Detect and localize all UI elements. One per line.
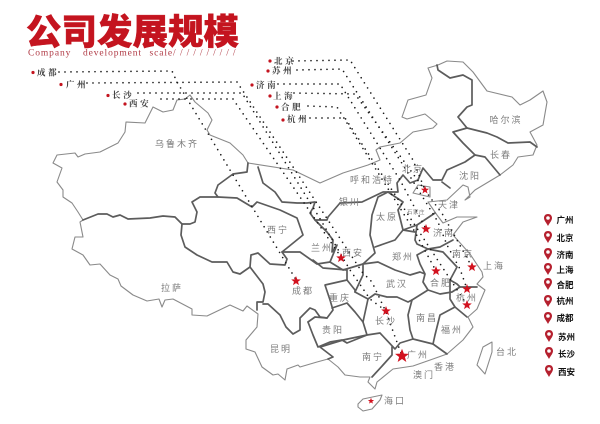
city names on map: 沈阳: [459, 170, 481, 181]
legend: city list: [544, 214, 576, 377]
legend: city list: 济南: [556, 250, 574, 260]
city names on map: 南京: [452, 248, 474, 259]
city names on map: 澳门: [413, 369, 435, 380]
city names on map: 海口: [384, 395, 406, 406]
city names on map: 南昌: [416, 312, 438, 323]
city names on map: 成都: [292, 285, 314, 296]
callout labels: 合肥: [281, 102, 303, 112]
route: suzhou: [297, 69, 467, 289]
subtitle: scale/: [150, 48, 177, 58]
city names on map: 广州: [407, 349, 429, 360]
route: hangzhou: [310, 118, 467, 305]
city names on map: 杭州: [456, 292, 478, 303]
city names on map: 哈尔滨: [489, 114, 523, 125]
city names on map: 西安: [342, 247, 364, 258]
legend: city list: 杭州: [556, 296, 574, 306]
city names on map: 贵阳: [322, 324, 344, 335]
city names on map: 上海: [483, 260, 505, 271]
city names on map: 呼和浩特: [350, 174, 394, 185]
red star markers: [291, 186, 477, 404]
province boundaries: [83, 65, 537, 377]
route: chengdu: [59, 71, 298, 283]
callout labels: 济南: [256, 80, 278, 90]
island: taiwan: [477, 342, 492, 374]
legend: city list: 西安: [558, 367, 576, 377]
callout labels: 西安: [129, 98, 151, 108]
city names on map: 武汉: [386, 278, 408, 289]
city names on map: 兰州: [311, 242, 333, 253]
city names on map: 银川: [339, 196, 361, 207]
route: shanghai: [294, 93, 472, 267]
legend: city list: 上海: [556, 265, 574, 275]
china map outline: [53, 61, 547, 411]
city names on map: 西宁: [267, 224, 289, 235]
city names on map: 天津: [438, 200, 460, 210]
city names on map: 福州: [441, 324, 463, 335]
city names on map: 郑州: [392, 251, 414, 262]
subtitle: / / / / / / / / /: [180, 48, 236, 58]
city names on map: 合肥: [430, 277, 452, 288]
city names on map: 济南: [433, 227, 455, 238]
city names on map: 香港: [434, 361, 456, 372]
city names on map: 拉萨: [161, 282, 183, 293]
callout labels: 上海: [273, 91, 295, 101]
dotted connector lines: [59, 60, 472, 356]
subtitle: development: [83, 48, 142, 58]
legend: city list: 北京: [556, 233, 574, 243]
callout labels: 北京: [274, 56, 296, 66]
route: changsha: [138, 93, 386, 311]
legend: city list: 合肥: [556, 280, 574, 290]
title: 公司发展规模: [26, 12, 240, 52]
route: guangzhou: [87, 82, 402, 356]
city names on map: [155, 114, 523, 406]
callout labels: 广州: [66, 80, 88, 90]
callout labels: 苏州: [272, 66, 294, 76]
city names on map: 北京: [402, 163, 424, 174]
route: xian: [161, 99, 341, 257]
city names on map: 长沙: [375, 315, 397, 326]
legend: city list: 苏州: [558, 332, 575, 342]
legend: city list: 长沙: [558, 349, 576, 359]
city names on map: 长春: [490, 149, 512, 160]
beijing boundary: [413, 185, 430, 197]
route: hefei: [308, 106, 436, 271]
city names on map: 乌鲁木齐: [155, 138, 199, 149]
city names on map: 太原: [376, 211, 398, 222]
callout labels: 杭州: [287, 114, 309, 124]
route: beijing: [293, 60, 425, 190]
city names on map: 重庆: [329, 292, 351, 303]
legend: city list: 成都: [556, 313, 574, 323]
city names on map: 南宁: [362, 351, 384, 362]
subtitle: Company: [28, 48, 71, 58]
city names on map: 昆明: [270, 344, 292, 354]
legend: city list: 广州: [556, 215, 574, 225]
city names on map: 石家庄: [407, 208, 425, 216]
subtitle: [28, 48, 236, 58]
island: hainan: [358, 395, 382, 411]
callout labels: 成都: [37, 68, 59, 78]
callout labels: [31, 56, 309, 124]
callout labels: 长沙: [112, 90, 134, 100]
west and south border: [53, 61, 547, 389]
city names on map: 台北: [496, 346, 518, 357]
route: jinan: [278, 84, 426, 229]
